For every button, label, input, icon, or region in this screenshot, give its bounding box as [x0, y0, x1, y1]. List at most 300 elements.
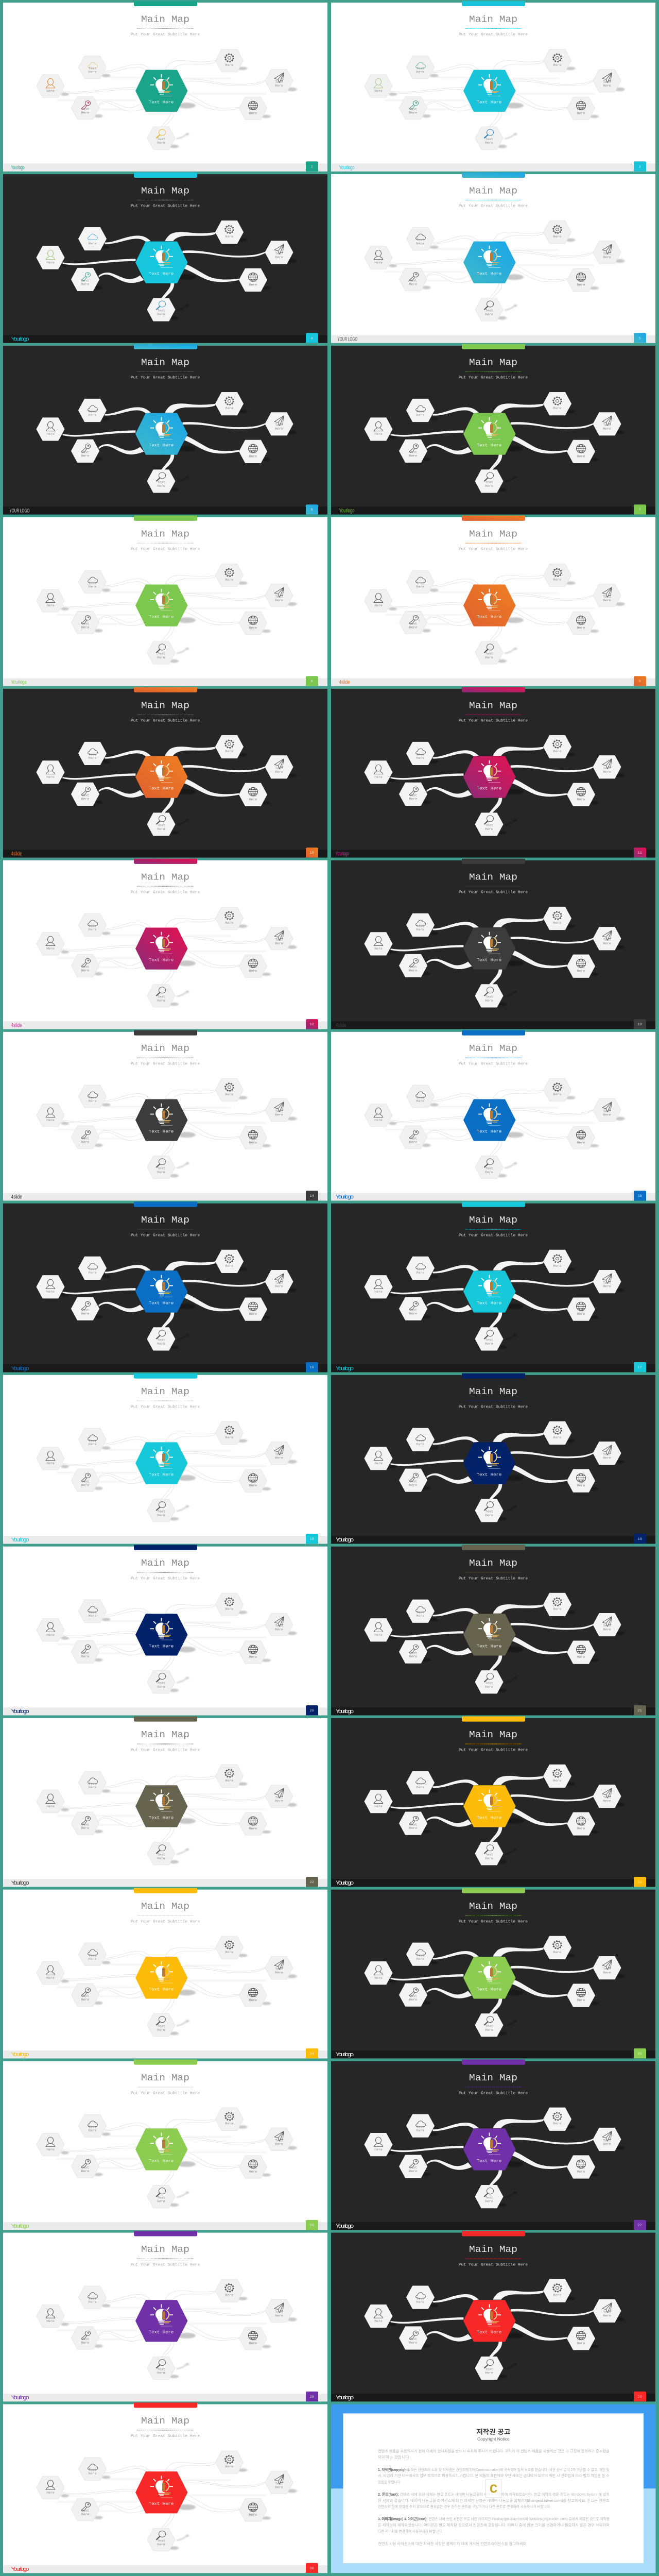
node: cloud: Here [89, 71, 97, 74]
node: globe: Here [577, 1484, 585, 1487]
logo: 4slide [11, 851, 22, 857]
node: person: Here [374, 1805, 383, 1808]
subtitle: Put Your Great Subtitle Here [459, 548, 528, 552]
central hexagon: Text Here [477, 1129, 501, 1134]
page number [306, 504, 318, 515]
node: globe [239, 440, 267, 463]
node: search: Here [157, 1514, 165, 1517]
logo: Yourlogo [11, 2566, 29, 2572]
node: person [37, 2304, 64, 2328]
top tab [462, 173, 525, 178]
subtitle: Put Your Great Subtitle Here [459, 33, 528, 37]
node: gear: Here [226, 750, 234, 753]
node: globe: Here [249, 2342, 257, 2345]
connectors [57, 232, 297, 320]
top tab [134, 1716, 197, 1722]
node: globe [239, 2327, 267, 2350]
central hexagon: Text Here [477, 2159, 501, 2163]
connectors [57, 1947, 297, 2035]
node: cloud: Here [417, 2129, 425, 2132]
node: globe [239, 955, 267, 977]
node: gear: Here [226, 578, 234, 582]
connectors [385, 1776, 625, 1863]
node: key: Text [409, 1480, 418, 1483]
node: cloud: Text [89, 2297, 97, 2300]
node: plane [593, 1099, 621, 1122]
slide background [3, 1032, 327, 1200]
node: plane: Text [603, 1453, 611, 1456]
node: cloud: Text [417, 2126, 425, 2129]
connectors [57, 1090, 297, 1177]
node: cloud: Here [89, 928, 97, 931]
node: key: Here [409, 454, 418, 457]
logo: Yourlogo [11, 2223, 29, 2229]
node: globe [239, 1126, 267, 1149]
node: cloud: Text [417, 1783, 425, 1786]
node: cloud: Text [417, 1268, 425, 1271]
node: plane: Text [275, 1281, 283, 1285]
node: person: Here [374, 1633, 383, 1637]
node: plane: Text [275, 2482, 283, 2485]
node: cloud [407, 56, 435, 79]
node: globe [567, 268, 595, 292]
node: key: Text [409, 2166, 418, 2170]
subtitle: Put Your Great Subtitle Here [131, 2434, 200, 2438]
node: key: Text [81, 622, 90, 625]
central hexagon: Text Here [149, 2330, 174, 2335]
node: search: Here [485, 1171, 493, 1174]
node: search [147, 2185, 175, 2208]
node: person [365, 1619, 392, 1641]
page number: 12 [310, 1023, 314, 1027]
node: search: Text [157, 1338, 165, 1342]
node: key: Here [81, 454, 90, 457]
node: key [71, 1297, 99, 1320]
node: cloud: Text [89, 1268, 97, 1271]
node: person [37, 1104, 64, 1127]
intro paragraph [378, 2449, 610, 2460]
top tab [462, 1030, 525, 1036]
node: search [475, 298, 503, 321]
node: key: Text [409, 794, 418, 797]
node: plane [593, 70, 621, 92]
node: gear [544, 2279, 571, 2302]
node: cloud: Text [417, 2297, 425, 2300]
page number: 24 [310, 2052, 314, 2056]
slide: page 14 [3, 1030, 327, 1200]
title: Main Map [469, 1558, 517, 1569]
slide: page 7 [331, 344, 655, 515]
node: gear [544, 1250, 571, 1273]
top tab [462, 2231, 525, 2236]
node: globe [239, 268, 267, 292]
node: gear: Here [553, 2294, 562, 2297]
node: key [71, 2498, 99, 2521]
node: plane: Text [275, 595, 283, 599]
top tab [134, 1, 197, 6]
node: person [365, 246, 392, 269]
node: gear: Here [553, 1264, 562, 1268]
slide: page 23 [331, 1716, 655, 1887]
central hexagon [135, 1442, 187, 1484]
title: Main Map [469, 14, 517, 25]
top tab [134, 1202, 197, 1207]
node: plane: Here [603, 2143, 611, 2146]
node: globe: Text [577, 1652, 585, 1655]
subtitle: Put Your Great Subtitle Here [131, 1749, 200, 1752]
node: search: Here [485, 999, 493, 1003]
title: Main Map [469, 1386, 517, 1397]
node: search: Text [485, 1167, 493, 1170]
slide: page 21 [331, 1545, 655, 1715]
node: key: Text [81, 965, 90, 969]
page number: 3 [639, 165, 641, 169]
central hexagon: Text Here [477, 2330, 501, 2335]
paragraph: copyright: 있음을 알립니다. [378, 2480, 401, 2484]
title: Main Map [141, 185, 189, 196]
node: plane: Here [603, 1113, 611, 1117]
central hexagon: Text Here [149, 1301, 174, 1306]
node: search: Here [157, 2371, 165, 2375]
title: Main Map [141, 1215, 189, 1226]
page number: 6 [311, 508, 313, 512]
slide background [331, 860, 655, 1029]
top tab [134, 516, 197, 521]
node: cloud: Here [89, 1271, 97, 1275]
node: key [400, 2155, 427, 2178]
node: key: Here [409, 1998, 418, 2002]
page number [634, 1191, 646, 1200]
slide: page 10 [3, 687, 327, 858]
logo: 4slide [11, 1023, 22, 1028]
page number [634, 1019, 646, 1029]
node: globe: Text [577, 108, 585, 111]
node: person [365, 1104, 392, 1127]
node: search [475, 1499, 503, 1522]
top tab [134, 2231, 197, 2236]
node: gear [215, 1936, 243, 1959]
node: search [147, 641, 175, 664]
subtitle: Put Your Great Subtitle Here [459, 1234, 528, 1238]
title: Main Map [141, 1558, 189, 1569]
node: cloud: Text [417, 925, 425, 928]
node: key: Text [81, 279, 90, 283]
node: gear: Here [226, 2465, 234, 2469]
node: cloud: Here [89, 2129, 97, 2132]
node: cloud [78, 1600, 106, 1622]
node: globe: Text [577, 279, 585, 283]
node: globe: Text [249, 1823, 257, 1827]
node: plane: Here [275, 84, 283, 88]
node: plane: Text [603, 252, 611, 256]
page number: 16 [310, 1366, 314, 1370]
slide background [331, 3, 655, 172]
page number [634, 676, 646, 686]
subtitle: Put Your Great Subtitle Here [459, 2092, 528, 2095]
node: key: Text [409, 1137, 418, 1140]
node: search: Here [485, 484, 493, 488]
node: key [71, 611, 99, 634]
central hexagon [463, 242, 516, 283]
node: search: Text [157, 652, 165, 656]
node: search: Text [157, 138, 165, 141]
node: cloud: Here [89, 585, 97, 588]
node: globe: Here [249, 112, 257, 115]
logo: Yourlogo [11, 1880, 29, 1886]
node: person [365, 1447, 392, 1470]
node: plane [265, 1613, 293, 1636]
node: key [400, 1640, 427, 1663]
node: cloud: Here [417, 1614, 425, 1618]
subtitle: Put Your Great Subtitle Here [131, 1920, 200, 1924]
node: gear [544, 1593, 571, 1616]
node: plane [593, 2128, 621, 2151]
node: globe [239, 1641, 267, 1664]
node: key: Here [409, 111, 418, 114]
node: key [400, 1469, 427, 1492]
title: Main Map [141, 2244, 189, 2255]
slide: page 17 [331, 1202, 655, 1372]
node: cloud: Here [417, 585, 425, 588]
node: person: Here [46, 604, 55, 607]
node: globe: Here [577, 283, 585, 286]
node: cloud: Here [89, 1614, 97, 1618]
central hexagon [135, 242, 187, 283]
page number [306, 1191, 318, 1200]
node: key: Text [409, 2337, 418, 2341]
node: key: Text [81, 2337, 90, 2341]
node: globe [239, 783, 267, 806]
node: key: Text [409, 965, 418, 969]
page number [634, 333, 646, 343]
node: key: Text [81, 1480, 90, 1483]
node: plane [265, 1270, 293, 1293]
node: key: Text [409, 108, 418, 111]
node: globe: Here [249, 970, 257, 973]
node: plane: Text [603, 1968, 611, 1971]
node: cloud: Text [417, 1439, 425, 1443]
node: plane [265, 756, 293, 778]
node: key: Text [81, 108, 90, 111]
node: plane: Here [275, 256, 283, 259]
node: search: Here [157, 827, 165, 831]
node: key [400, 439, 427, 463]
node: key: Here [81, 626, 90, 629]
paragraph: font: 컨텐츠의 질에 영향을 주지 않으므로 필요없는 경우 원하는 폰트를 구입하거나 다른 폰트로 변경하여 사용하시기 바랍니다. [378, 2504, 551, 2509]
logo: Yourlogo [336, 1880, 354, 1886]
connectors [57, 1433, 297, 1520]
logo: Yourlogo [11, 1709, 29, 1715]
connectors [385, 404, 625, 491]
node: globe [239, 1469, 267, 1492]
node: gear [544, 907, 571, 930]
subtitle: Put Your Great Subtitle Here [131, 2092, 200, 2095]
node: gear: Here [226, 2294, 234, 2297]
node: search [147, 2528, 175, 2551]
connectors [385, 61, 625, 148]
slide: page 9 [331, 516, 655, 686]
node: cloud: Text [89, 2126, 97, 2129]
node: search: Here [157, 484, 165, 488]
node: globe: Here [577, 112, 585, 115]
central hexagon [463, 1785, 516, 1827]
node: plane: Text [275, 1453, 283, 1456]
node: cloud [407, 1771, 435, 1794]
node: globe: Text [249, 2166, 257, 2170]
node: plane: Text [603, 1796, 611, 1800]
node: key: Here [409, 969, 418, 972]
node: search: Here [485, 313, 493, 316]
node: gear [215, 392, 243, 415]
node: search: Text [157, 1853, 165, 1856]
slide: page 27 [331, 2059, 655, 2230]
node: plane: Text [275, 938, 283, 942]
node: search: Here [157, 1857, 165, 1860]
node: person: Here [374, 2148, 383, 2151]
central hexagon: Text Here [149, 1987, 174, 1992]
node: search [475, 2185, 503, 2208]
node: cloud [78, 1943, 106, 1965]
node: key: Text [81, 451, 90, 454]
node: search: Text [485, 1853, 493, 1856]
notice heading: 저작권 공고 [477, 2428, 510, 2435]
closing paragraph: 컨텐츠 사용 라이선스에 대한 자세한 사항은 홈페이지 내에 게시된 컨텐츠라이선스를 참고하세요. [378, 2541, 527, 2546]
title: Main Map [141, 1043, 189, 1054]
slide background [331, 174, 655, 343]
node: plane [265, 1956, 293, 1979]
subtitle: Put Your Great Subtitle Here [131, 719, 200, 723]
central hexagon [135, 1957, 187, 1998]
node: person: Here [374, 604, 383, 607]
title: Main Map [141, 1901, 189, 1912]
node: cloud [78, 227, 106, 250]
connectors [385, 1604, 625, 1692]
node: globe [239, 612, 267, 634]
node: person [37, 1619, 64, 1641]
central hexagon: Text Here [477, 100, 501, 105]
node: search: Here [485, 1342, 493, 1346]
node: person [365, 2304, 392, 2328]
connectors [57, 1261, 297, 1349]
title: Main Map [469, 1730, 517, 1740]
node: search: Here [485, 2028, 493, 2032]
title: Main Map [141, 2416, 189, 2427]
top tab [462, 859, 525, 864]
node: search: Here [157, 2200, 165, 2204]
top tab [462, 687, 525, 692]
central hexagon: Text Here [149, 1129, 174, 1134]
slide: page 30 [3, 2402, 327, 2573]
node: key: Here [81, 1483, 90, 1487]
node: search [147, 2357, 175, 2380]
slide background [3, 1547, 327, 1715]
node: person: Here [46, 1976, 55, 1980]
node: cloud: Here [89, 1099, 97, 1103]
logo: Yourlogo [339, 508, 355, 514]
node: search: Text [157, 995, 165, 999]
page number [306, 1534, 318, 1544]
node: plane: Here [275, 1628, 283, 1632]
node: key: Here [81, 969, 90, 972]
node: plane: Here [275, 942, 283, 945]
page number: 8 [311, 680, 313, 684]
top tab [462, 1716, 525, 1722]
slide background [3, 689, 327, 858]
node: globe: Text [249, 108, 257, 111]
node: key [400, 1126, 427, 1148]
slide: page 18 [3, 1374, 327, 1544]
node: plane: Here [603, 1971, 611, 1974]
logo: Yourlogo [336, 1537, 354, 1543]
node: globe [567, 2327, 595, 2350]
node: search [147, 1156, 175, 1179]
node: globe: Here [249, 1655, 257, 1659]
node: globe: Text [577, 622, 585, 626]
node: person [37, 589, 64, 612]
top tab [134, 1545, 197, 1550]
subtitle: Put Your Great Subtitle Here [131, 1234, 200, 1238]
node: search: Here [485, 2371, 493, 2375]
slide: page 6 [3, 344, 327, 515]
node: search: Here [157, 2028, 165, 2032]
title: Main Map [469, 1043, 517, 1054]
central hexagon [463, 1099, 516, 1141]
node: globe: Text [249, 451, 257, 454]
node: key: Text [81, 2509, 90, 2513]
node: person: Here [46, 89, 55, 93]
node: gear: Here [226, 1951, 234, 1954]
node: cloud [407, 399, 435, 422]
node: search: Text [485, 652, 493, 656]
slide background [331, 1375, 655, 1544]
slide: page 13 [331, 859, 655, 1029]
top tab [462, 1202, 525, 1207]
title: Main Map [469, 185, 517, 196]
central hexagon [135, 2471, 187, 2513]
node: cloud [78, 2458, 106, 2480]
node: plane [593, 1956, 621, 1979]
node: key: Text [81, 1309, 90, 1312]
node: cloud [78, 2286, 106, 2309]
node: search: Text [157, 1167, 165, 1170]
node: person: Here [374, 775, 383, 779]
slide background [331, 1547, 655, 1715]
slide background [3, 174, 327, 343]
page number [306, 1362, 318, 1372]
node: globe [239, 1984, 267, 2007]
paragraph: font: 된 서체와 같습니다. 네이버 나눔글꼴 라이선스에 대한 자세한 사항은 네이버 나눔글꼴 홈페이지(hangeul.naver.com)를 참고하세요. 폰트는 컨텐츠 [378, 2498, 610, 2503]
node: person [37, 75, 64, 97]
node: gear [215, 2279, 243, 2302]
node: plane: Here [275, 1800, 283, 1803]
logo: Yourlogo [11, 2395, 29, 2401]
node: person [37, 1790, 64, 1813]
node: key: Text [81, 794, 90, 797]
node: person: Here [46, 2491, 55, 2495]
node: key [71, 1640, 99, 1663]
node: search: Text [485, 2196, 493, 2199]
node: person: Here [46, 1290, 55, 1294]
node: search: Here [485, 141, 493, 145]
node: globe: Here [249, 1827, 257, 1831]
slide background [331, 517, 655, 686]
node: plane [593, 241, 621, 264]
node: plane [265, 2299, 293, 2323]
node: key [71, 439, 99, 463]
title: Main Map [469, 1215, 517, 1226]
title: Main Map [141, 529, 189, 539]
subtitle: Put Your Great Subtitle Here [131, 1577, 200, 1581]
